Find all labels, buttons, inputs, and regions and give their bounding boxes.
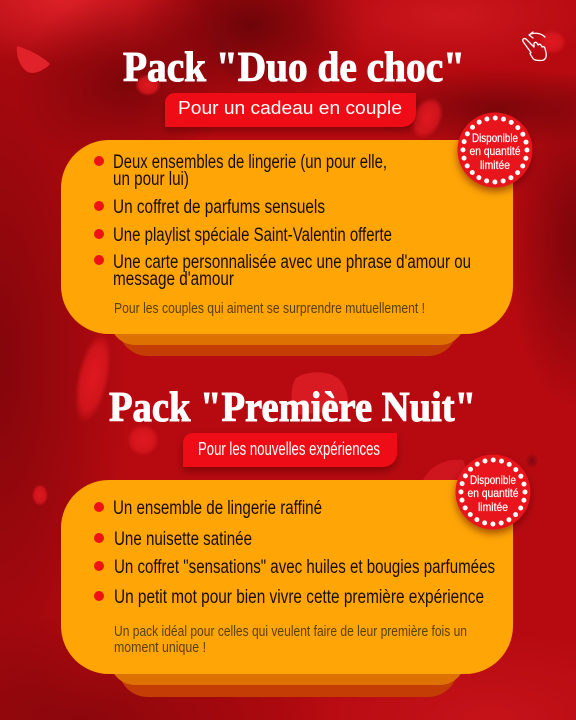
title: Pack Première Nuit: Pack "Première Nuit" — [109, 385, 476, 431]
bullet list: message d'amour — [113, 269, 235, 290]
panel: Première Nuit — [61, 480, 513, 697]
note — [114, 623, 467, 656]
bullet list: Une nuisette satinée — [114, 529, 252, 550]
bullet list: Un coffret de parfums sensuels — [113, 197, 325, 218]
subtitle pill: experiences: Pour les nouvelles expériences — [198, 439, 380, 459]
bullet list: un pour lui) — [113, 169, 189, 190]
subtitle pill: couple — [165, 93, 416, 127]
bullet list: Une carte personnalisée avec une phrase d'amour ou — [113, 252, 471, 273]
title: Pack Duo de choc: Pack "Duo de choc" — [123, 45, 465, 91]
panel: Duo de choc — [61, 140, 513, 356]
background petals — [17, 9, 566, 506]
badge: limited quantity 1: Disponible — [472, 131, 518, 145]
badge: limited quantity 1 — [458, 112, 532, 188]
icon: tap hand — [523, 32, 546, 60]
badge: limited quantity 2: Disponible — [470, 473, 516, 487]
note: moment unique ! — [114, 639, 206, 656]
badge: limited quantity 2: limitée — [478, 500, 508, 514]
note: Pour les couples qui aiment se surprendre mutuellement ! — [114, 300, 425, 317]
subtitle pill: experiences — [183, 433, 397, 467]
badge: limited quantity 1: en quantité — [470, 144, 521, 158]
badge: limited quantity 2 — [456, 454, 530, 530]
bullet list: Deux ensembles de lingerie (un pour elle, — [113, 152, 387, 173]
note: Un pack idéal pour celles qui veulent faire de leur première fois un — [114, 623, 467, 640]
bullet list — [94, 498, 495, 608]
subtitle pill: couple: Pour un cadeau en couple — [178, 98, 402, 118]
bullet list: Un ensemble de lingerie raffiné — [113, 498, 322, 519]
bullet list: Un petit mot pour bien vivre cette première expérience — [114, 587, 484, 608]
bullet list: Une playlist spéciale Saint-Valentin offerte — [113, 225, 392, 246]
bullet list — [94, 152, 471, 290]
badge: limited quantity 1: limitée — [480, 158, 510, 172]
badge: limited quantity 2: en quantité — [468, 486, 519, 500]
